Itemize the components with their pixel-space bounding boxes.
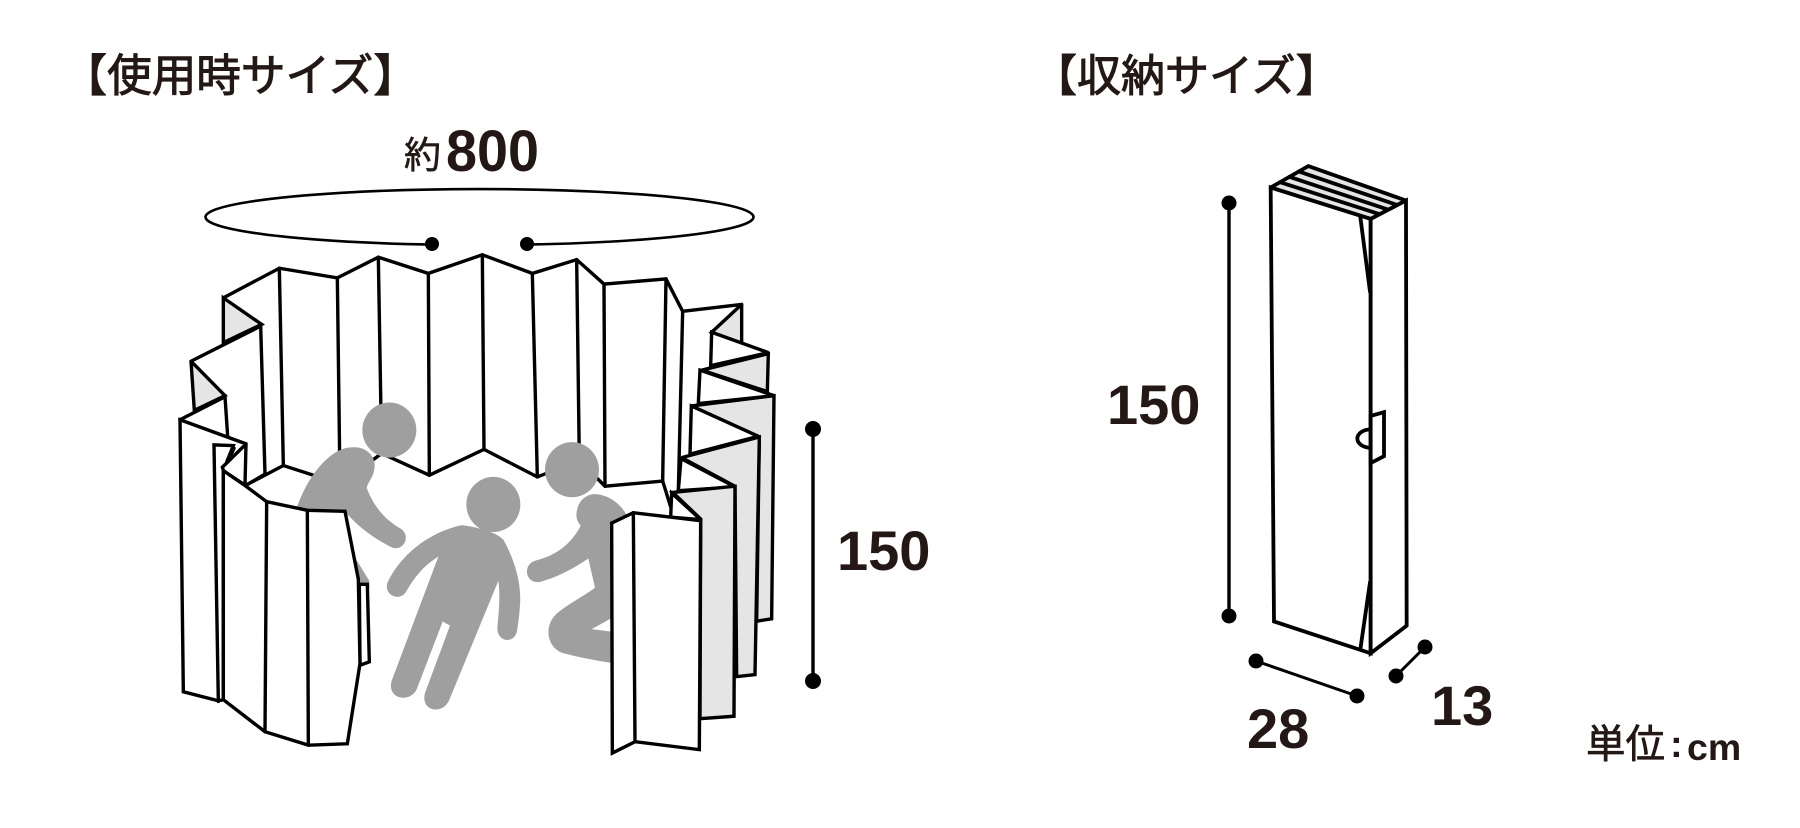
folded box illustration [1271, 166, 1407, 653]
height value: 150 [837, 519, 930, 582]
heading: in-use size: 【使用時サイズ】 [62, 52, 418, 101]
height dimension line [805, 421, 821, 689]
box front face [1271, 188, 1371, 653]
panel: in-use size figure [180, 119, 930, 753]
back wall panels [223, 255, 742, 507]
circumference ellipse arrow [205, 189, 754, 251]
child: centre standing [387, 477, 520, 709]
left folded panels [180, 326, 369, 745]
circumference label: 800 [446, 119, 539, 184]
heading: stored size: 【収納サイズ】 [1033, 52, 1340, 101]
fastening tab [1357, 412, 1384, 463]
width value: 28 [1247, 697, 1309, 760]
panel: stored size figure [1107, 166, 1493, 760]
circumference label: 約 [404, 135, 441, 176]
unit note: cm [1687, 726, 1741, 768]
box side face [1371, 201, 1407, 653]
child: back left [297, 403, 416, 588]
right folded panels [612, 304, 774, 753]
child: right crouching [527, 442, 627, 667]
box height dimension line [1222, 196, 1236, 624]
box top pleats [1271, 166, 1406, 219]
pleat curves [1360, 217, 1370, 649]
depth dimension line [1388, 640, 1432, 684]
unit note [1586, 723, 1741, 768]
child figures [297, 403, 627, 709]
circumference label [404, 119, 539, 184]
unit note: 単位 [1586, 723, 1665, 767]
depth value: 13 [1431, 674, 1493, 737]
box height value: 150 [1107, 373, 1200, 436]
width dimension line [1248, 654, 1364, 704]
unit note: : [1670, 724, 1683, 766]
folding wall illustration with children [180, 255, 774, 753]
